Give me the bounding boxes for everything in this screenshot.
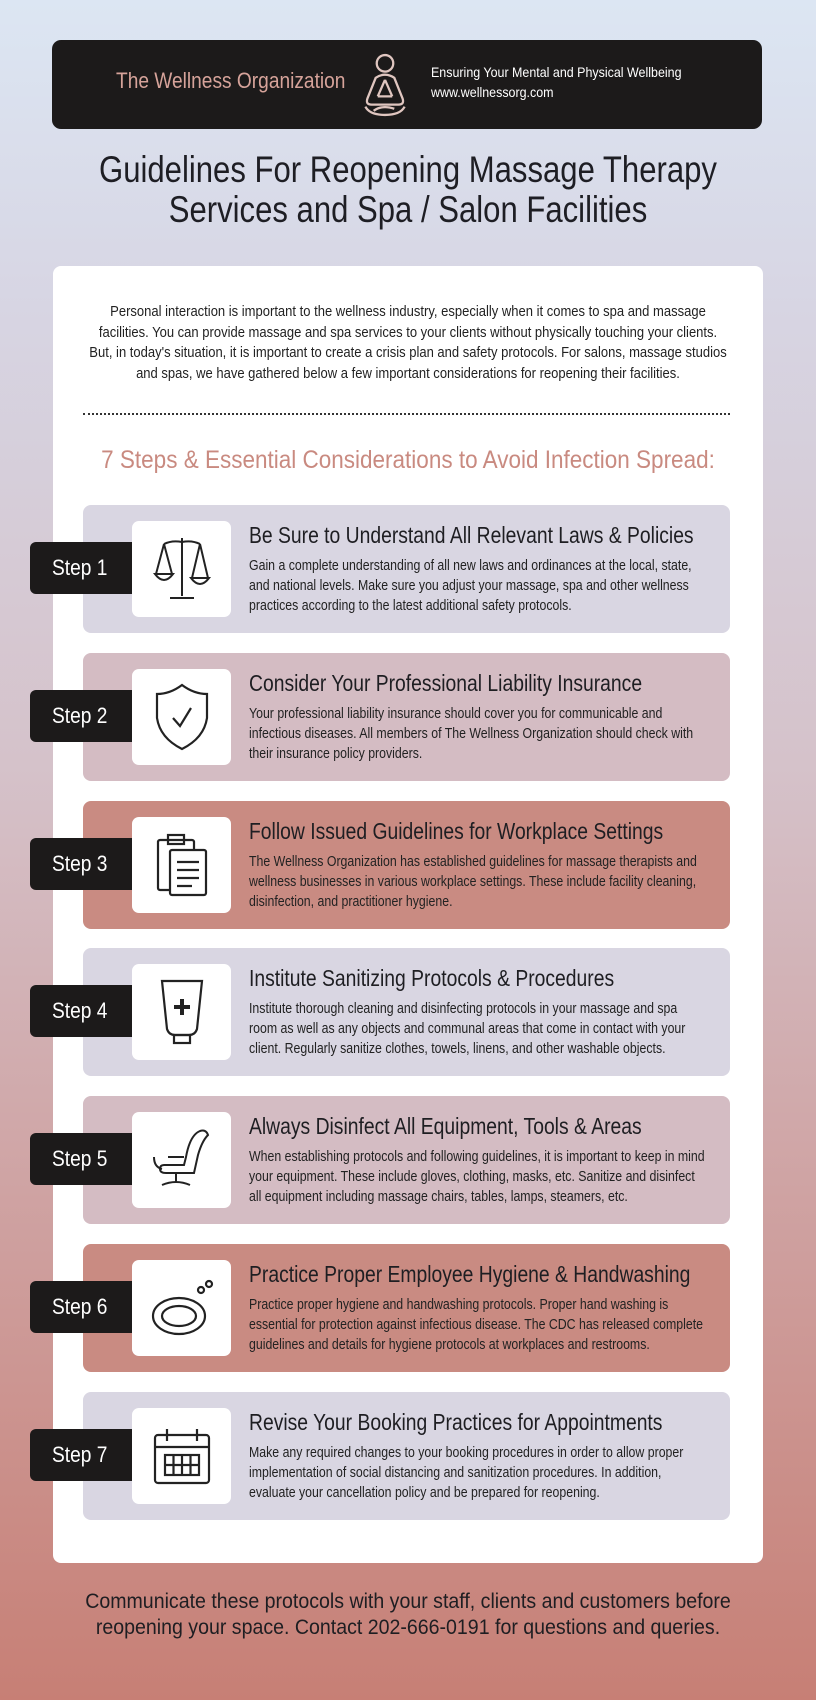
heading: Consider Your Professional Liability Insurance <box>249 670 642 696</box>
step label <box>30 838 132 890</box>
step label <box>30 542 132 594</box>
step label <box>30 1133 132 1185</box>
org name: The Wellness Organization <box>116 68 345 93</box>
step label <box>30 1429 132 1481</box>
body: Institute thorough cleaning and disinfecting protocols in your massage and spa room as well as any objects and communal areas that come in contact with your client. Regularly sanitize clothes, towels, linens, and other washable objects. <box>249 1001 685 1057</box>
icon: clipboard <box>132 817 231 913</box>
body: Make any required changes to your booking procedures in order to allow proper implementation of social distancing and sanitization procedures. In addition, evaluate your cancellation policy and be prepared for reopening. <box>249 1445 683 1501</box>
header bar <box>52 40 762 129</box>
icon: shield check <box>132 669 231 765</box>
heading: Follow Issued Guidelines for Workplace Settings <box>249 818 663 844</box>
tagline <box>431 64 682 100</box>
subheading: 7 Steps & Essential Considerations to Avoid Infection Spread: <box>101 446 715 474</box>
icon: soap <box>132 1260 231 1356</box>
heading: Institute Sanitizing Protocols & Procedures <box>249 965 614 991</box>
step label: Step 7 <box>52 1442 107 1467</box>
body: When establishing protocols and following guidelines, it is important to keep in mind your equipment. These include gloves, clothing, masks, etc. Sanitize and disinfect all equipment including massage chairs, tables, lamps, steamers, etc. <box>249 1149 705 1205</box>
intro text: Personal interaction is important to the wellness industry, especially when it comes to spa and massage facilities. You can provide massage and spa services to your clients without physically touching your clients. But, in today's situation, it is important to create a crisis plan and safety protocols. For salons, massage studios and spas, we have gathered below a few important considerations for reopening their facilities. <box>89 304 727 382</box>
title: Services and Spa / Salon Facilities <box>169 189 647 230</box>
icon: salon chair <box>132 1112 231 1208</box>
step 5 panel <box>83 1096 730 1224</box>
step 1 panel <box>83 505 730 633</box>
step label: Step 5 <box>52 1146 107 1171</box>
footer text: Communicate these protocols with your staff, clients and customers before <box>85 1589 731 1613</box>
step 7 panel <box>83 1392 730 1520</box>
heading: Practice Proper Employee Hygiene & Handwashing <box>249 1261 690 1287</box>
step label <box>30 985 132 1037</box>
step label: Step 2 <box>52 703 107 728</box>
icon: scales <box>132 521 231 617</box>
body: Gain a complete understanding of all new laws and ordinances at the local, state, and national levels. Make sure you adjust your massage, spa and other wellness practices according to the latest additional safety protocols. <box>249 558 692 614</box>
footer text <box>85 1589 731 1639</box>
heading: Be Sure to Understand All Relevant Laws & Policies <box>249 522 694 548</box>
step label <box>30 1281 132 1333</box>
tagline: www.wellnessorg.com <box>431 84 554 100</box>
title: Guidelines For Reopening Massage Therapy <box>99 149 717 190</box>
body: Practice proper hygiene and handwashing protocols. Proper hand washing is essential for protection against infectious disease. The CDC has released complete guidelines and details for hygiene protocols at workplaces and restrooms. <box>249 1297 703 1353</box>
tagline: Ensuring Your Mental and Physical Wellbeing <box>431 64 682 80</box>
step 3 panel <box>83 801 730 929</box>
footer text: reopening your space. Contact 202-666-0191 for questions and queries. <box>96 1615 720 1639</box>
step 4 panel <box>83 948 730 1076</box>
heading: Revise Your Booking Practices for Appointments <box>249 1409 662 1435</box>
step label <box>30 690 132 742</box>
step label: Step 6 <box>52 1294 107 1319</box>
icon: meditating person <box>364 54 406 116</box>
icon: calendar <box>132 1408 231 1504</box>
heading: Always Disinfect All Equipment, Tools & Areas <box>249 1113 642 1139</box>
white content card <box>53 266 763 1563</box>
body: Your professional liability insurance should cover you for communicable and infectious diseases. All members of The Wellness Organization should check with their insurance policy providers. <box>249 706 693 762</box>
title <box>99 149 717 230</box>
step label: Step 3 <box>52 851 107 876</box>
step label: Step 4 <box>52 998 107 1023</box>
icon: sanitizer tube <box>132 964 231 1060</box>
step 6 panel <box>83 1244 730 1372</box>
body: The Wellness Organization has established guidelines for massage therapists and wellness businesses in various workplace settings. These include facility cleaning, disinfection, and practitioner hygiene. <box>249 854 697 910</box>
step 2 panel <box>83 653 730 781</box>
step label: Step 1 <box>52 555 107 580</box>
